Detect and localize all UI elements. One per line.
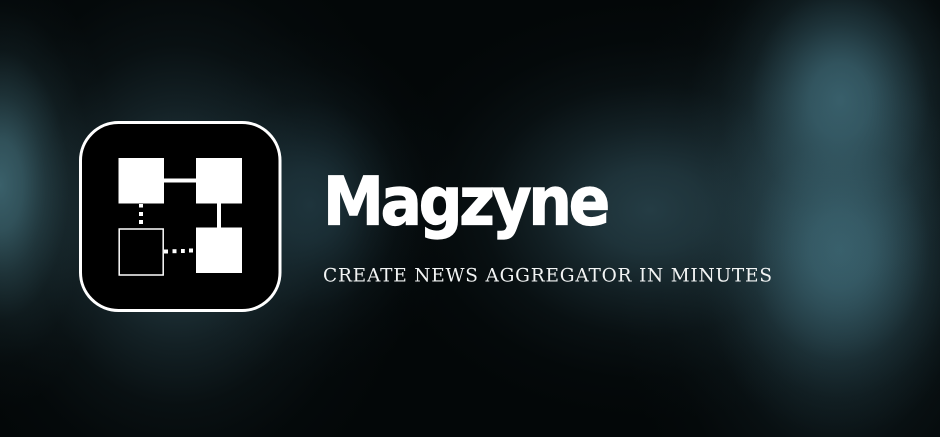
dotted connector bottom — [164, 248, 193, 254]
bottom-left outlined node — [119, 229, 163, 275]
bottom-right node — [196, 228, 242, 273]
top-left node — [118, 158, 164, 204]
dotted connector left — [139, 204, 143, 224]
icon: Magzyne node logo — [80, 122, 280, 310]
icon tile — [80, 122, 280, 310]
top-right node — [196, 158, 242, 204]
solid connector right — [217, 203, 221, 228]
tagline: CREATE NEWS AGGREGATOR IN MINUTES — [323, 266, 772, 286]
title: Magzyne — [323, 162, 608, 240]
solid connector top — [164, 178, 196, 182]
